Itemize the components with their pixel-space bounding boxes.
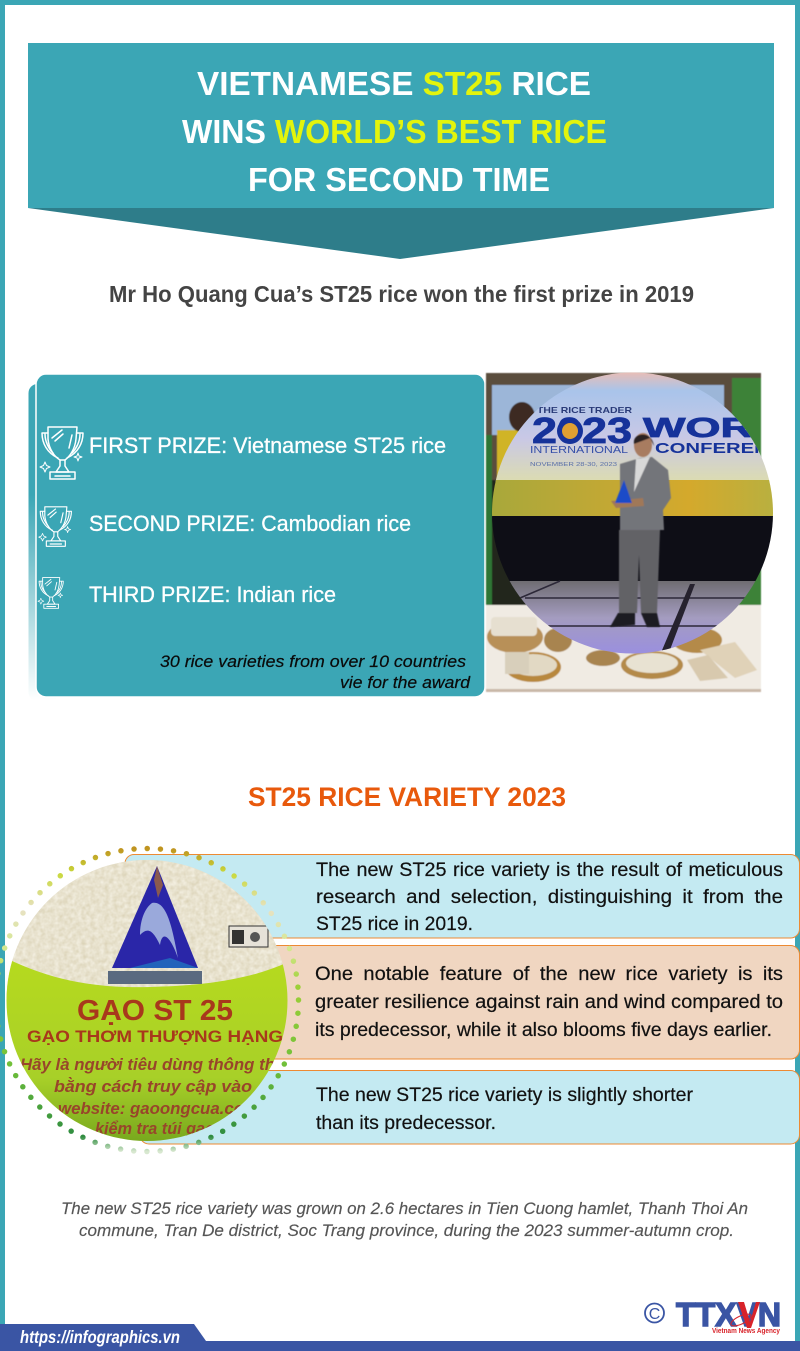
title line 1: VIETNAMESE ST25 RICE [197, 65, 591, 102]
bag lettering: kiểm tra túi gạo [95, 1120, 215, 1138]
panel: fact 1: research and selection, distinguishing it from the [316, 886, 783, 908]
award note [160, 652, 471, 692]
man with trophy [610, 433, 671, 627]
logo: TTXVN: C [649, 1306, 660, 1323]
panel: fact 3: The new ST25 rice variety is slightly shorter [316, 1084, 693, 1106]
panel: fact 1: ST25 rice in 2019. [316, 913, 473, 935]
bag lettering: GẠO ST 25 [77, 995, 233, 1027]
panel: fact 3 [140, 1070, 800, 1144]
title line 2: WINS WORLD’S BEST RICE [182, 113, 607, 150]
logo: TTXVN: TTXVN [676, 1296, 781, 1333]
icon: third prize trophy [38, 578, 63, 608]
third prize text: THIRD PRIZE: Indian rice [89, 582, 336, 607]
photo circle: INTERNATIONAL [530, 445, 629, 456]
dotted ring [0, 848, 298, 1152]
photo circle: THE RICE TRADER [537, 405, 632, 415]
award trophy on bag [108, 866, 268, 984]
photo circle: NOVEMBER 28-30, 2023 [530, 462, 617, 468]
panel: fact 1 [125, 854, 800, 938]
bag lettering: bằng cách truy cập vào [54, 1077, 252, 1096]
award note: vie for the award [340, 673, 471, 692]
panel: fact 3: than its predecessor. [316, 1112, 496, 1134]
footnote: commune, Tran De district, Soc Trang province, during the 2023 summer-autumn crop. [79, 1221, 734, 1240]
award note: 30 rice varieties from over 10 countries [160, 652, 467, 671]
logo: TTXVN: Vietnam News Agency [712, 1326, 781, 1335]
second prize text: SECOND PRIZE: Cambodian rice [89, 511, 411, 536]
bag lettering [20, 995, 283, 1138]
photo: award winner on stage [486, 372, 800, 692]
bag lettering: GẠO THƠM THƯỢNG HẠNG [27, 1027, 283, 1046]
icon: second prize trophy [39, 507, 71, 546]
footnote: The new ST25 rice variety was grown on 2.6 hectares in Tien Cuong hamlet, Thanh Thoi An [61, 1199, 748, 1218]
photo circle: WORLD [643, 412, 800, 443]
website url: https://infographics.vn [20, 1327, 180, 1347]
panel: fact 2: One notable feature of the new rice variety is its [315, 963, 783, 985]
panel: prizes [28, 374, 485, 701]
subtitle: Mr Ho Quang Cua’s ST25 rice won the first prize in 2019 [109, 281, 694, 307]
first prize text: FIRST PRIZE: Vietnamese ST25 rice [89, 433, 446, 458]
icon: first prize trophy [40, 427, 83, 479]
bag lettering: Hãy là người tiêu dùng thông th [20, 1056, 275, 1074]
bag lettering: website: gaoongcua.co [58, 1100, 244, 1118]
photo circle [490, 372, 800, 655]
panel: fact 2 [125, 946, 800, 1059]
panel: fact 1: The new ST25 rice variety is the result of meticulous [316, 859, 783, 881]
screen lettering: 2023 [532, 410, 632, 451]
photo circle: CONFERENCE [655, 440, 797, 457]
title banner [28, 43, 774, 259]
section heading: ST25 RICE VARIETY 2023 [248, 782, 566, 812]
title line 3: FOR SECOND TIME [248, 161, 550, 198]
panel: fact 2: greater resilience against rain and wind compared to [315, 991, 783, 1013]
footer bar [0, 1324, 800, 1351]
photo: ST25 rice bag [0, 848, 298, 1152]
panel: fact 2: its predecessor, while it also blooms five days earlier. [315, 1019, 772, 1041]
footnote [61, 1199, 748, 1240]
